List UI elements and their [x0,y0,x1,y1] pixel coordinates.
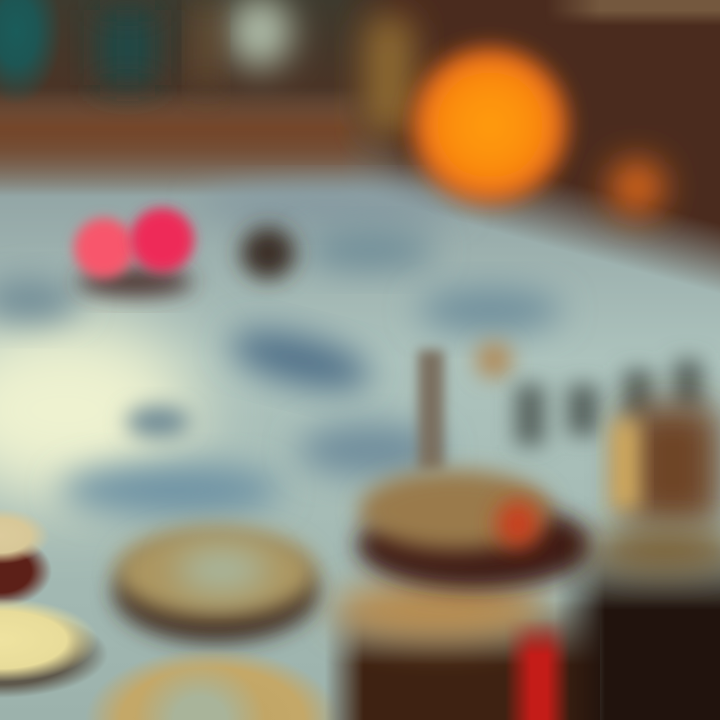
coin: bottom center [85,648,340,720]
table: blue-grey smudges [0,230,562,516]
table: grey shadow at back edge [200,187,460,223]
coin: center bottom [114,526,318,642]
wall: pale lamp glow [228,0,292,68]
table: pale glow lower left [0,320,195,500]
large orange orb [412,47,568,203]
wall: teal patch far left [0,0,65,105]
coin: left edge upper [0,508,52,607]
pin: tall grey-brown stem [418,350,444,470]
dark ball [241,227,295,279]
jar: right tan jar [612,405,720,525]
wall: amber bottle shape [364,15,414,135]
wall: teal patch second [100,10,155,85]
red ball pair [74,208,194,296]
red streak on jar [505,618,570,720]
pin: small tan ball [476,342,512,378]
small orange orb [609,159,665,215]
jar: upper dish [357,470,593,589]
wall: lower warm band [0,100,384,194]
jar: bottom right dark jar [555,526,720,720]
wall: right dark section [340,0,720,300]
wall: top right tan strip [556,0,720,23]
coin: left edge lower [0,598,108,698]
wall: warm brown post [195,0,217,85]
jar: lower amber jar body [325,580,600,720]
pins: row of small dark stems [516,360,702,445]
